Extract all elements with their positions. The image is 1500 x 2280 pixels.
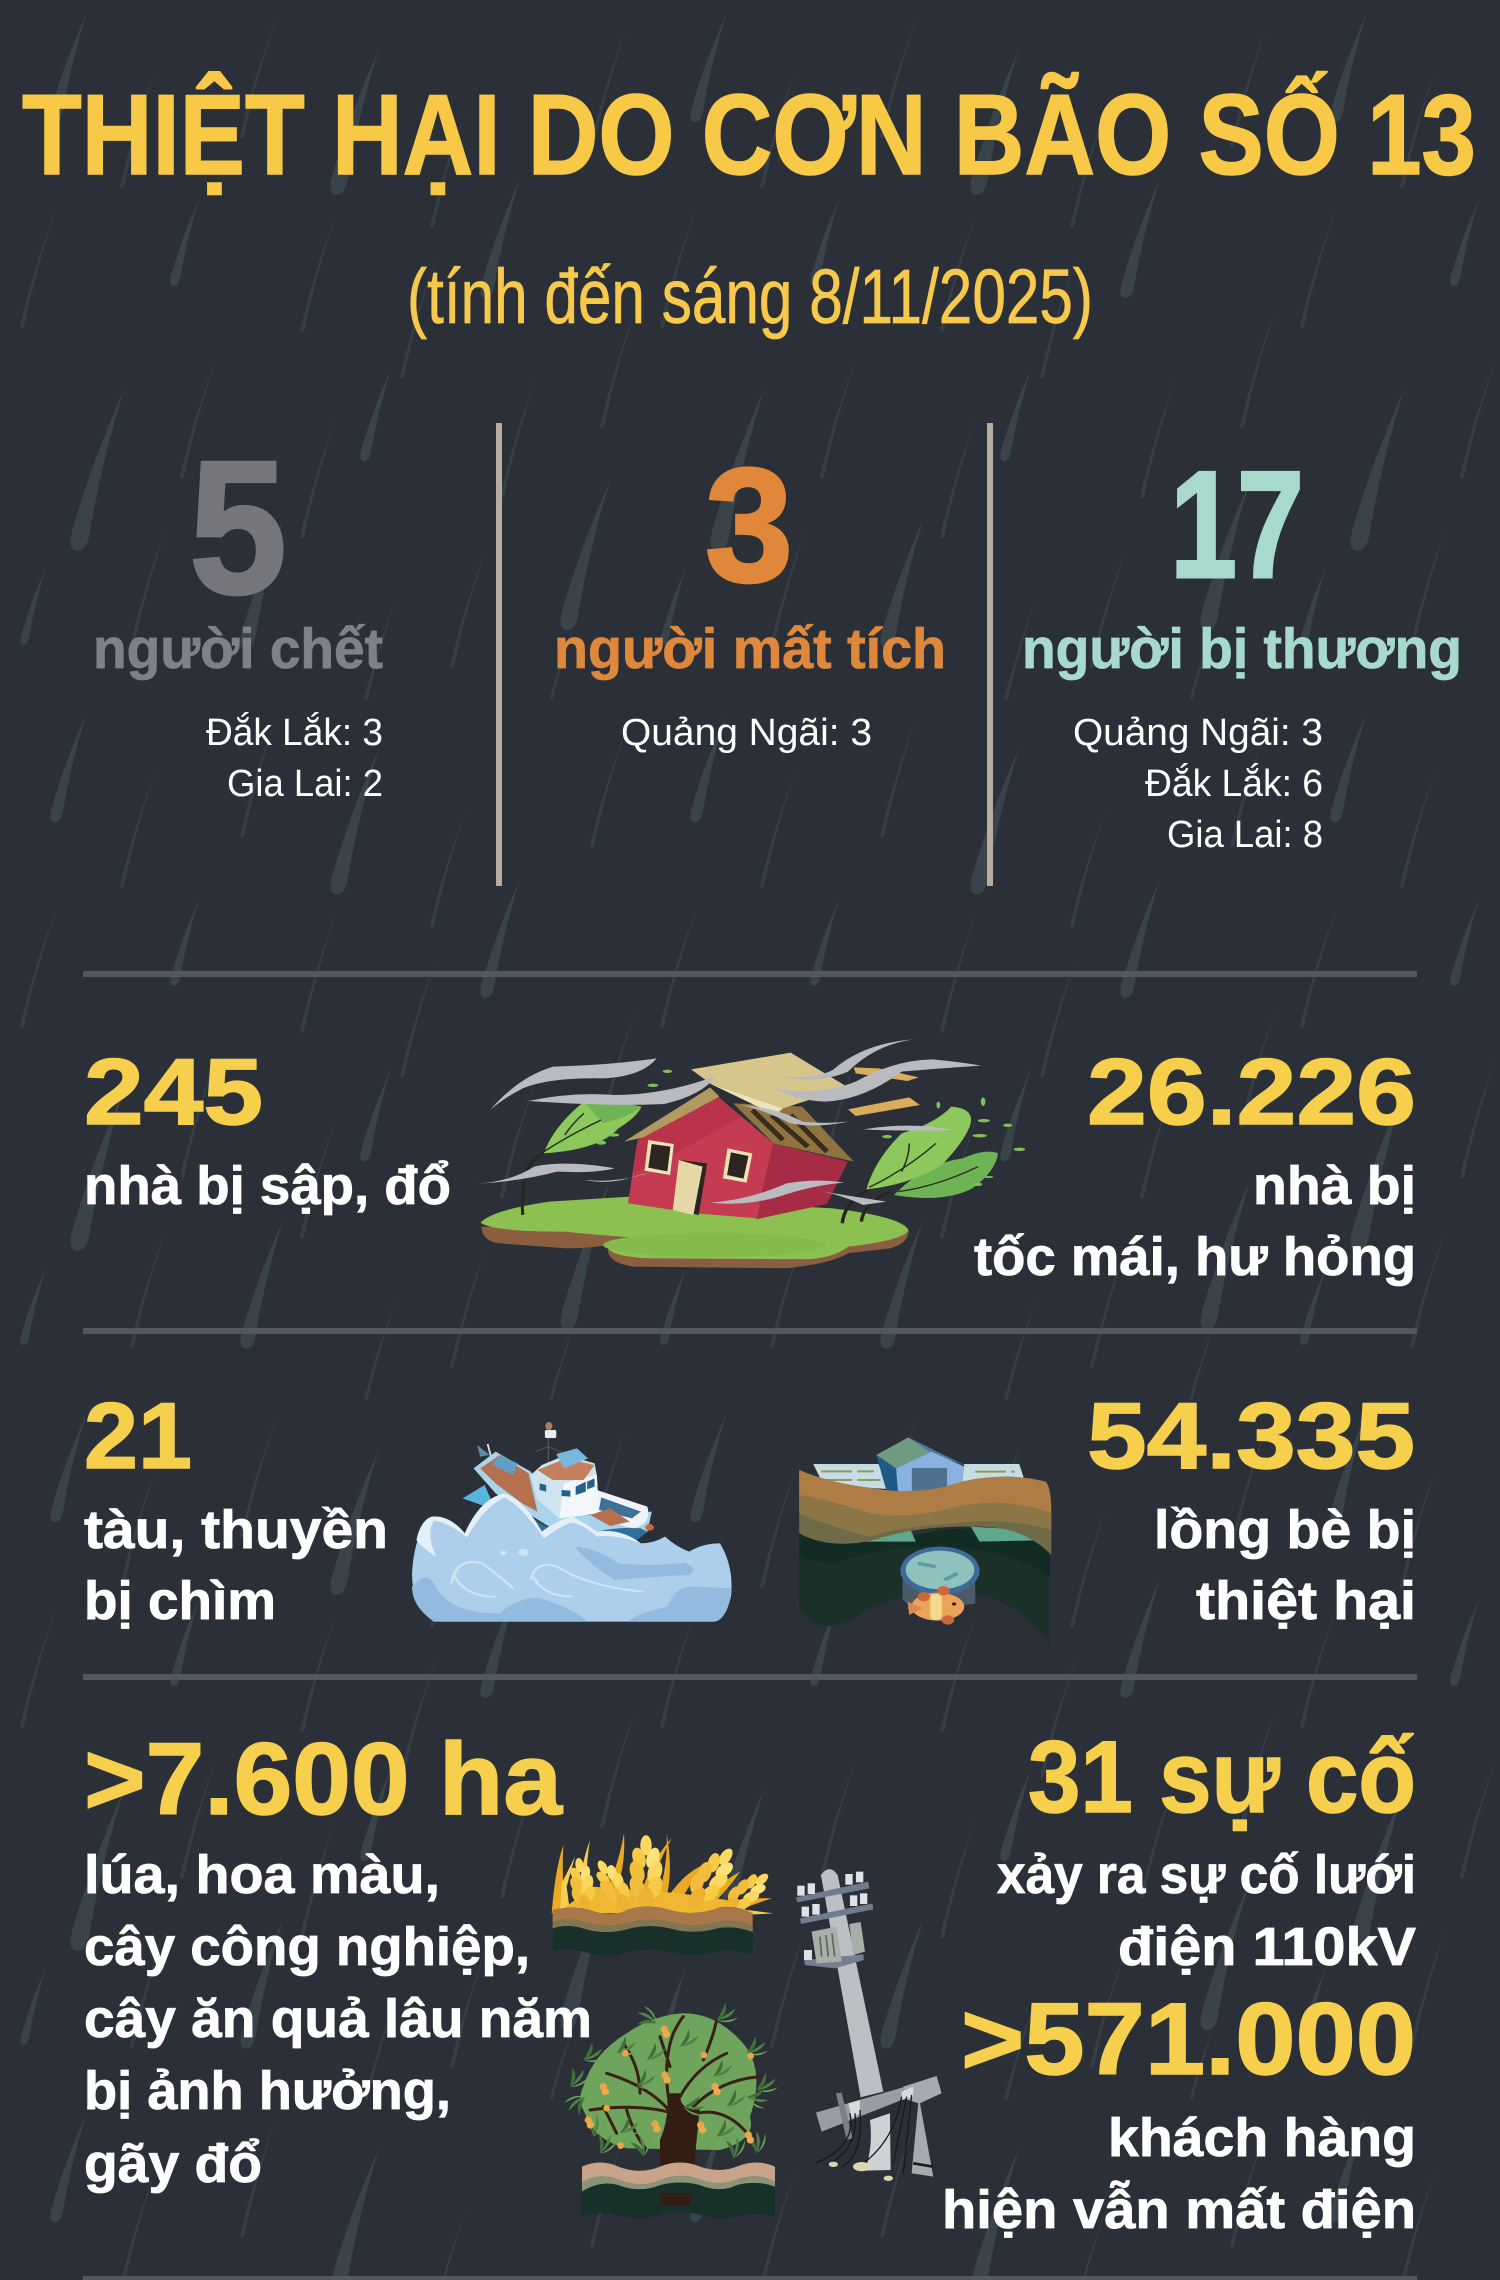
tree left	[522, 1153, 544, 1215]
cables	[815, 2095, 912, 2173]
broken beam	[903, 2076, 942, 2177]
windows and door	[644, 1140, 674, 1175]
house roof	[624, 1087, 719, 1142]
stat: grid incidents: điện 110kV	[1118, 1917, 1416, 1977]
icon: boat on waves	[412, 1422, 732, 1622]
soil	[582, 2162, 775, 2219]
stat: collapsed houses: nhà bị sập, đổ	[84, 1156, 451, 1216]
label: missing: người mất tích	[554, 617, 946, 681]
transformer	[812, 1927, 842, 1963]
pole	[821, 1869, 883, 2097]
breakdown: missing: Quảng Ngãi: 3	[621, 712, 872, 754]
soil	[553, 1907, 753, 1955]
wind streaks	[475, 1039, 981, 1205]
stat: damaged roofs: tốc mái, hư hỏng	[974, 1227, 1416, 1287]
stat: crops: cây ăn quả lâu năm	[84, 1989, 592, 2049]
tree right	[842, 1190, 890, 1223]
trunk and branches	[660, 2093, 700, 2207]
planks	[854, 1067, 919, 1081]
breakdown: deaths	[206, 711, 383, 805]
breakdown: injured: Đắk Lắk: 6	[1145, 762, 1323, 805]
deck	[813, 1464, 894, 1489]
leaves	[583, 2043, 605, 2062]
panel: deaths	[93, 422, 383, 805]
stat: sunk boats: 21	[84, 1383, 192, 1488]
fish	[907, 1586, 964, 1625]
stat: damaged roofs	[974, 1039, 1416, 1287]
hull	[474, 1452, 652, 1542]
ground	[481, 1227, 909, 1268]
icon: broken power pole	[796, 1869, 942, 2181]
canopy	[580, 2013, 756, 2150]
label: injured: người bị thương	[1022, 617, 1462, 681]
breakdown: injured: Quảng Ngãi: 3	[1073, 712, 1323, 754]
hut	[876, 1437, 931, 1468]
icon: fruit tree	[564, 2003, 778, 2219]
stat: customers without power: >571.000	[961, 1982, 1416, 2096]
stat: crops: gãy đổ	[84, 2134, 262, 2194]
breakdown: injured: Gia Lai: 8	[1167, 814, 1323, 856]
panel: missing	[554, 435, 946, 754]
stat: crops	[84, 1722, 592, 2194]
stat: customers without power: hiện vẫn mất điện	[942, 2180, 1416, 2240]
stat: damaged roofs: nhà bị	[1253, 1156, 1416, 1216]
number: deaths: 5	[189, 422, 287, 634]
stat: customers without power	[942, 1982, 1416, 2240]
stat: sunk boats: tàu, thuyền	[84, 1500, 388, 1560]
breakdown: deaths: Gia Lai: 2	[227, 763, 383, 805]
stat: damaged roofs: 26.226	[1087, 1039, 1416, 1144]
raft	[852, 1527, 1052, 1542]
wave	[412, 1493, 732, 1622]
stat: crops: lúa, hoa màu,	[84, 1845, 440, 1905]
stat: sunk boats: bị chìm	[84, 1571, 276, 1631]
panel: injured	[1022, 440, 1462, 856]
stat: crops: cây công nghiệp,	[84, 1917, 530, 1977]
stat: grid incidents	[997, 1720, 1416, 1977]
crossarms	[796, 1882, 869, 1902]
insulators	[797, 1872, 867, 1960]
cabin	[531, 1455, 599, 1518]
boat	[463, 1485, 496, 1510]
icon: wheat	[552, 1833, 777, 1955]
stat: customers without power: khách hàng	[1108, 2108, 1416, 2168]
icon: fish cages	[799, 1437, 1052, 1647]
subtitle: (tính đến sáng 8/11/2025)	[407, 254, 1093, 340]
fruits	[661, 2026, 670, 2038]
bow	[597, 1490, 648, 1528]
stat: collapsed houses: 245	[84, 1039, 263, 1144]
blades	[552, 1833, 773, 1915]
underwater	[799, 1528, 1050, 1647]
stat: grid incidents: 31 sự cố	[1028, 1720, 1416, 1834]
stat: collapsed houses	[84, 1039, 451, 1216]
breakdown: injured	[1073, 712, 1323, 856]
icon: house in storm	[475, 1039, 1025, 1268]
rubble	[829, 2162, 893, 2181]
stat: fish cages	[1087, 1383, 1416, 1631]
stat: grid incidents: xảy ra sự cố lưới	[997, 1845, 1416, 1905]
soil	[799, 1470, 1051, 1555]
number: missing: 3	[705, 435, 793, 616]
stat: fish cages: 54.335	[1087, 1383, 1415, 1488]
ears	[565, 1856, 599, 1914]
number: injured: 17	[1170, 440, 1304, 610]
house walls	[628, 1093, 773, 1218]
leaves flying	[596, 1070, 1025, 1186]
stat: crops: >7.600 ha	[84, 1722, 563, 1836]
breakdown: deaths: Đắk Lắk: 3	[206, 711, 383, 754]
stat: fish cages: lồng bè bị	[1154, 1500, 1416, 1560]
cage	[903, 1572, 975, 1608]
stat: crops: bị ảnh hưởng,	[84, 2061, 451, 2121]
label: deaths: người chết	[93, 617, 383, 681]
stat: fish cages: thiệt hại	[1196, 1571, 1416, 1631]
stat: sunk boats	[84, 1383, 388, 1631]
